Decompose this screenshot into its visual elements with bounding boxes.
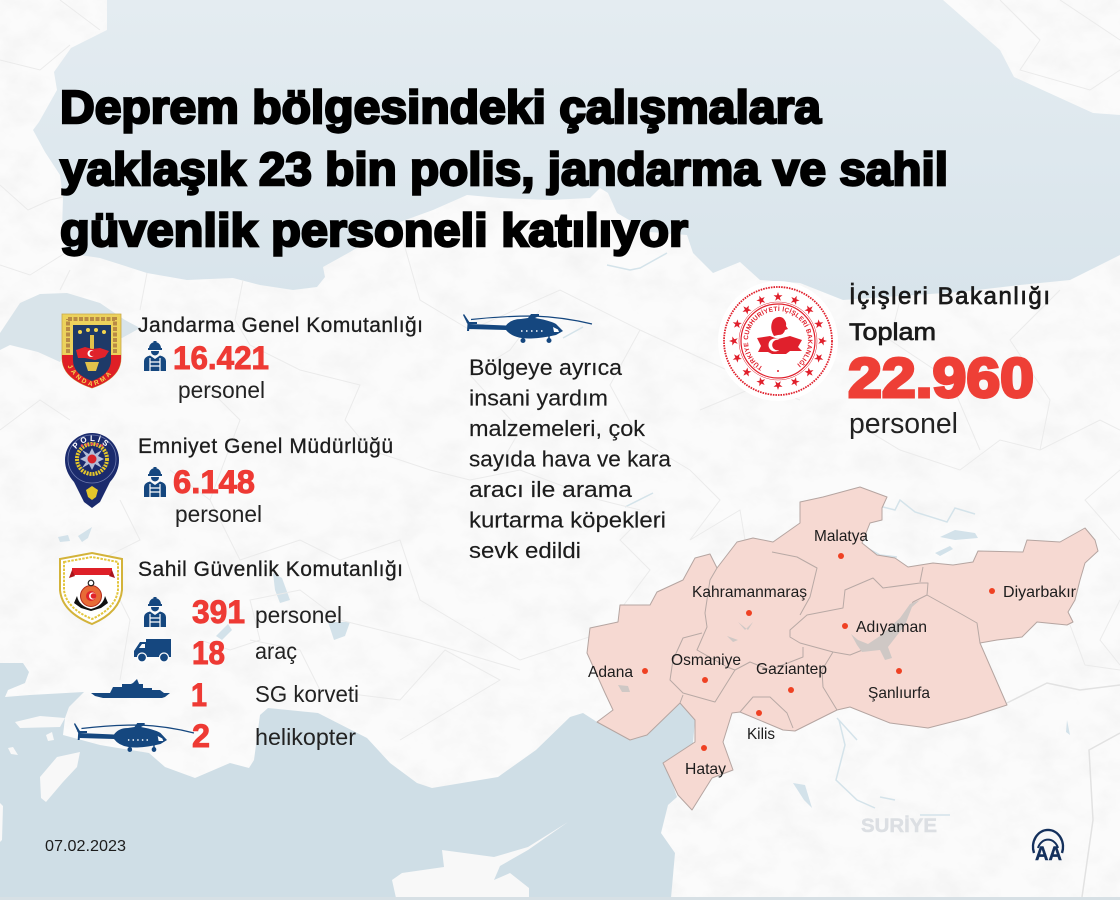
text block: aid note: malzemeleri, çok [469,416,646,441]
logo: AA: AA [1035,844,1062,865]
province labels: Hatay [685,761,726,778]
text block: aid note: insani yardım [469,386,608,410]
icon: jandarma emblem [62,314,122,388]
province borders [670,552,980,728]
heading: Emniyet Genel Müdürlüğü [138,435,393,458]
icon: police emblem [65,433,119,508]
panel: sahil güvenlik [60,553,403,754]
province labels: Malatya [814,528,868,545]
text block: aid note: aracı ile arama [469,477,633,502]
province labels: Gaziantep [756,661,827,678]
text block: aid note [469,355,672,563]
row: corvette: 1 [191,677,207,713]
province dots [642,553,995,751]
number: 16.421 [173,340,269,376]
text block: aid note: kurtarma köpekleri [469,508,666,532]
row: vehicles [134,635,297,671]
unit: personel [175,501,262,527]
row: vehicles: araç [255,638,297,664]
panel: emniyet [65,433,393,527]
lakes in provinces [618,600,920,692]
icon: personnel [144,341,166,371]
text block: aid note: sayıda hava ve kara [469,446,672,472]
icon: jandarma emblem: JANDARMA [68,365,112,386]
unit: personel [178,377,265,403]
row: personnel: personel [255,602,342,628]
heading: Sahil Güvenlik Komutanlığı [138,558,403,581]
unit: personel [849,408,958,440]
title: Deprem bölgesindeki çalışmalara [60,81,821,133]
icon: ministry emblem: TÜRKİYE CUMHURİYETİ İÇİŞLERİ BAKANLIĞI [744,306,812,371]
province labels: Adıyaman [856,619,927,636]
row: corvette: SG korveti [255,681,359,707]
Black Sea [33,0,1120,300]
affected provinces shape [587,487,1098,810]
title: yaklaşık 23 bin polis, jandarma ve sahil [60,143,948,195]
heading: İçişleri Bakanlığı [849,283,1050,310]
text block: aid note: Bölgeye ayrıca [469,355,623,380]
row: helicopter: helikopter [255,724,356,750]
icon: ministry emblem [723,281,838,398]
province labels: Osmaniye [671,652,741,669]
province labels: Kahramanmaraş [692,584,807,601]
province labels: Diyarbakır [1003,584,1077,601]
row: personnel [144,594,342,630]
Sea of Marmara [0,293,140,362]
islands [0,716,568,898]
title [60,81,948,256]
date: 07.02.2023 [45,838,126,855]
earthquake region map [587,487,1098,810]
row: vehicles: 18 [192,635,225,671]
row: helicopter [74,718,356,754]
panel: jandarma [62,314,423,403]
province labels [588,528,1077,778]
row: helicopter: 2 [192,718,210,754]
row: corvette [91,677,359,713]
text block: aid note: sevk edildi [469,538,581,563]
icon: personnel [144,467,166,497]
title: güvenlik personeli katılıyor [60,204,688,256]
Mediterranean and Aegean Sea [0,663,695,898]
label: Suriye: SURİYE [861,816,937,837]
province labels: Kilis [747,726,775,743]
province labels: Şanlıurfa [868,685,930,702]
icon: coast guard emblem [60,553,122,624]
heading: Jandarma Genel Komutanlığı [138,314,423,337]
subheading: Toplam [849,319,936,346]
panel: ministry total [848,283,1050,440]
number: 6.148 [173,464,255,500]
province labels: Adana [588,664,633,681]
logo: AA [1033,830,1063,865]
icon: helicopter [463,314,592,343]
icon: police emblem: POLİS [72,436,108,449]
lakes and rivers [58,527,1070,808]
total number: 22.960 [848,346,1034,409]
row: personnel: 391 [192,594,245,630]
